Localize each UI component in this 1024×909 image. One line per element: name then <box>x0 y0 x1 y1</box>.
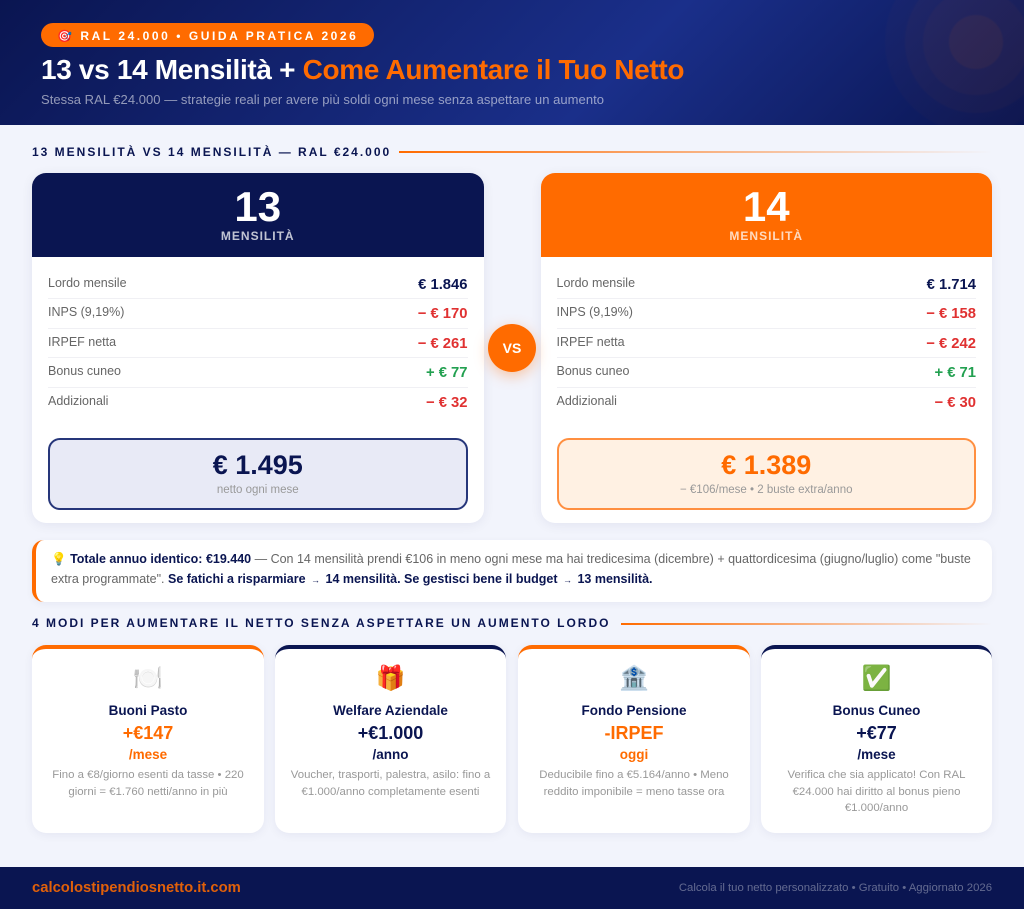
vs badge <box>488 324 536 372</box>
panel: 14 mensilità: Bonus cuneo <box>556 364 629 378</box>
card: welfare aziendale: €1.000/anno completamente esenti <box>302 786 479 798</box>
net result box: 14: € 1.389 <box>721 450 811 480</box>
card: bonus cuneo: €24.000 hai diritto al bonus pieno <box>793 786 960 798</box>
panel: 14 mensilità: − € 242 <box>926 336 976 352</box>
panel header: 14: MENSILITÀ <box>729 229 803 243</box>
icon: plate: 🍽️ <box>133 664 163 692</box>
card: fondo pensione: oggi <box>620 747 648 762</box>
net result box: 13 <box>48 438 468 510</box>
net result box: 13: netto ogni mese <box>217 484 299 496</box>
panel: 14 mensilità: IRPEF netta <box>556 335 625 349</box>
card: fondo pensione <box>518 645 750 833</box>
panel: 14 mensilità: INPS (9,19%) <box>556 305 633 319</box>
subtitle: Stessa RAL €24.000 — strategie reali per avere più soldi ogni mese senza aspettare un aumento <box>41 92 604 107</box>
card: buoni pasto: Fino a €8/giorno esenti da tasse • 220 <box>52 769 244 781</box>
panel: 14 mensilità: + € 71 <box>934 365 976 381</box>
footer <box>0 867 1024 909</box>
panel: 13 mensilità: Bonus cuneo <box>48 364 121 378</box>
panel header: 13 <box>32 173 484 257</box>
badge <box>41 23 374 47</box>
footer site link: calcolostipendiosnetto.it.com <box>32 880 241 896</box>
net result box: 13: € 1.495 <box>213 450 303 480</box>
panel: 13 mensilità: + € 77 <box>426 365 468 381</box>
callout: totale annuo <box>32 540 992 602</box>
net result box: 14: − €106/mese • 2 buste extra/anno <box>680 484 852 496</box>
card: bonus cuneo: Bonus Cuneo <box>833 703 920 718</box>
panel: 14 mensilità: Lordo mensile <box>556 276 635 290</box>
panel: 13 mensilità <box>32 173 484 523</box>
panel: 13 mensilità: INPS (9,19%) <box>48 305 124 319</box>
card: fondo pensione: reddito imponibile = meno tasse ora <box>544 786 724 798</box>
card: fondo pensione: -IRPEF <box>604 723 664 743</box>
card: welfare aziendale <box>275 645 506 833</box>
panel: 14 mensilità: € 1.714 <box>927 277 976 293</box>
panel: 13 mensilità: − € 170 <box>418 306 468 322</box>
header banner <box>0 0 1024 125</box>
card: fondo pensione: Fondo Pensione <box>581 703 686 718</box>
panel: 13 mensilità: € 1.846 <box>418 277 468 293</box>
panel: 13 mensilità: Lordo mensile <box>48 276 127 290</box>
card: buoni pasto: /mese <box>129 747 167 762</box>
card: welfare aziendale: +€1.000 <box>358 723 423 743</box>
card: buoni pasto: giorni = €1.760 netti/anno in più <box>68 786 228 798</box>
icon: bank: 🏦 <box>619 664 649 692</box>
panel header: 14 <box>540 173 992 257</box>
card: welfare aziendale: Voucher, trasporti, palestra, asilo: fino a <box>291 769 490 781</box>
card: buoni pasto: +€147 <box>123 723 173 743</box>
card: welfare aziendale: /anno <box>372 747 408 762</box>
card: bonus cuneo: /mese <box>857 747 896 762</box>
section heading: comparison: 13 MENSILITÀ VS 14 MENSILITÀ — RAL €24.000 <box>32 145 391 159</box>
decorative glow circle <box>884 0 1024 134</box>
card: bonus cuneo <box>761 645 992 833</box>
vs badge: VS <box>503 340 521 356</box>
panel: 14 mensilità: − € 30 <box>934 395 976 411</box>
panel: 14 mensilità: Addizionali <box>556 394 617 408</box>
badge: 🎯 RAL 24.000 • GUIDA PRATICA 2026 <box>57 29 358 43</box>
footer note: Calcola il tuo netto personalizzato • Gratuito • Aggiornato 2026 <box>679 882 992 894</box>
icon: check: ✅ <box>862 664 891 692</box>
panel: 13 mensilità: − € 32 <box>426 395 468 411</box>
panel header: 13: 13 <box>234 183 281 230</box>
card: buoni pasto <box>32 645 264 833</box>
panel header: 14: 14 <box>743 183 790 230</box>
callout: totale annuo: 💡 Totale annuo identico: €19.440 — Con 14 mensilità prendi €106 in meno ogni mese ma hai tredicesima (dicembre) + quattordicesima (giugno/luglio) come "buste extra programmate". Se fatichi a risparmiare → 14 mensilità. Se gestisci bene il budget → 13 mensilità. <box>51 552 971 586</box>
title: 13 vs 14 Mensilità + Come Aumentare il Tuo Netto <box>41 54 684 85</box>
card: buoni pasto: Buoni Pasto <box>109 703 187 718</box>
card: bonus cuneo: €1.000/anno <box>845 802 908 814</box>
panel: 14 mensilità <box>540 173 992 523</box>
card: bonus cuneo: +€77 <box>856 723 897 743</box>
panel: 13 mensilità: − € 261 <box>418 336 468 352</box>
panel: 13 mensilità: Addizionali <box>48 394 108 408</box>
section heading: 4 modi: 4 MODI PER AUMENTARE IL NETTO SENZA ASPETTARE UN AUMENTO LORDO <box>32 616 610 630</box>
panel: 13 mensilità: IRPEF netta <box>48 335 116 349</box>
panel header: 13: MENSILITÀ <box>221 229 295 243</box>
card: fondo pensione: Deducibile fino a €5.164/anno • Meno <box>539 769 729 781</box>
card: bonus cuneo: Verifica che sia applicato! Con RAL <box>788 769 965 781</box>
panel: 14 mensilità: − € 158 <box>926 306 976 322</box>
card: welfare aziendale: Welfare Aziendale <box>333 703 448 718</box>
icon: gift: 🎁 <box>376 664 405 692</box>
net result box: 14 <box>556 438 976 510</box>
